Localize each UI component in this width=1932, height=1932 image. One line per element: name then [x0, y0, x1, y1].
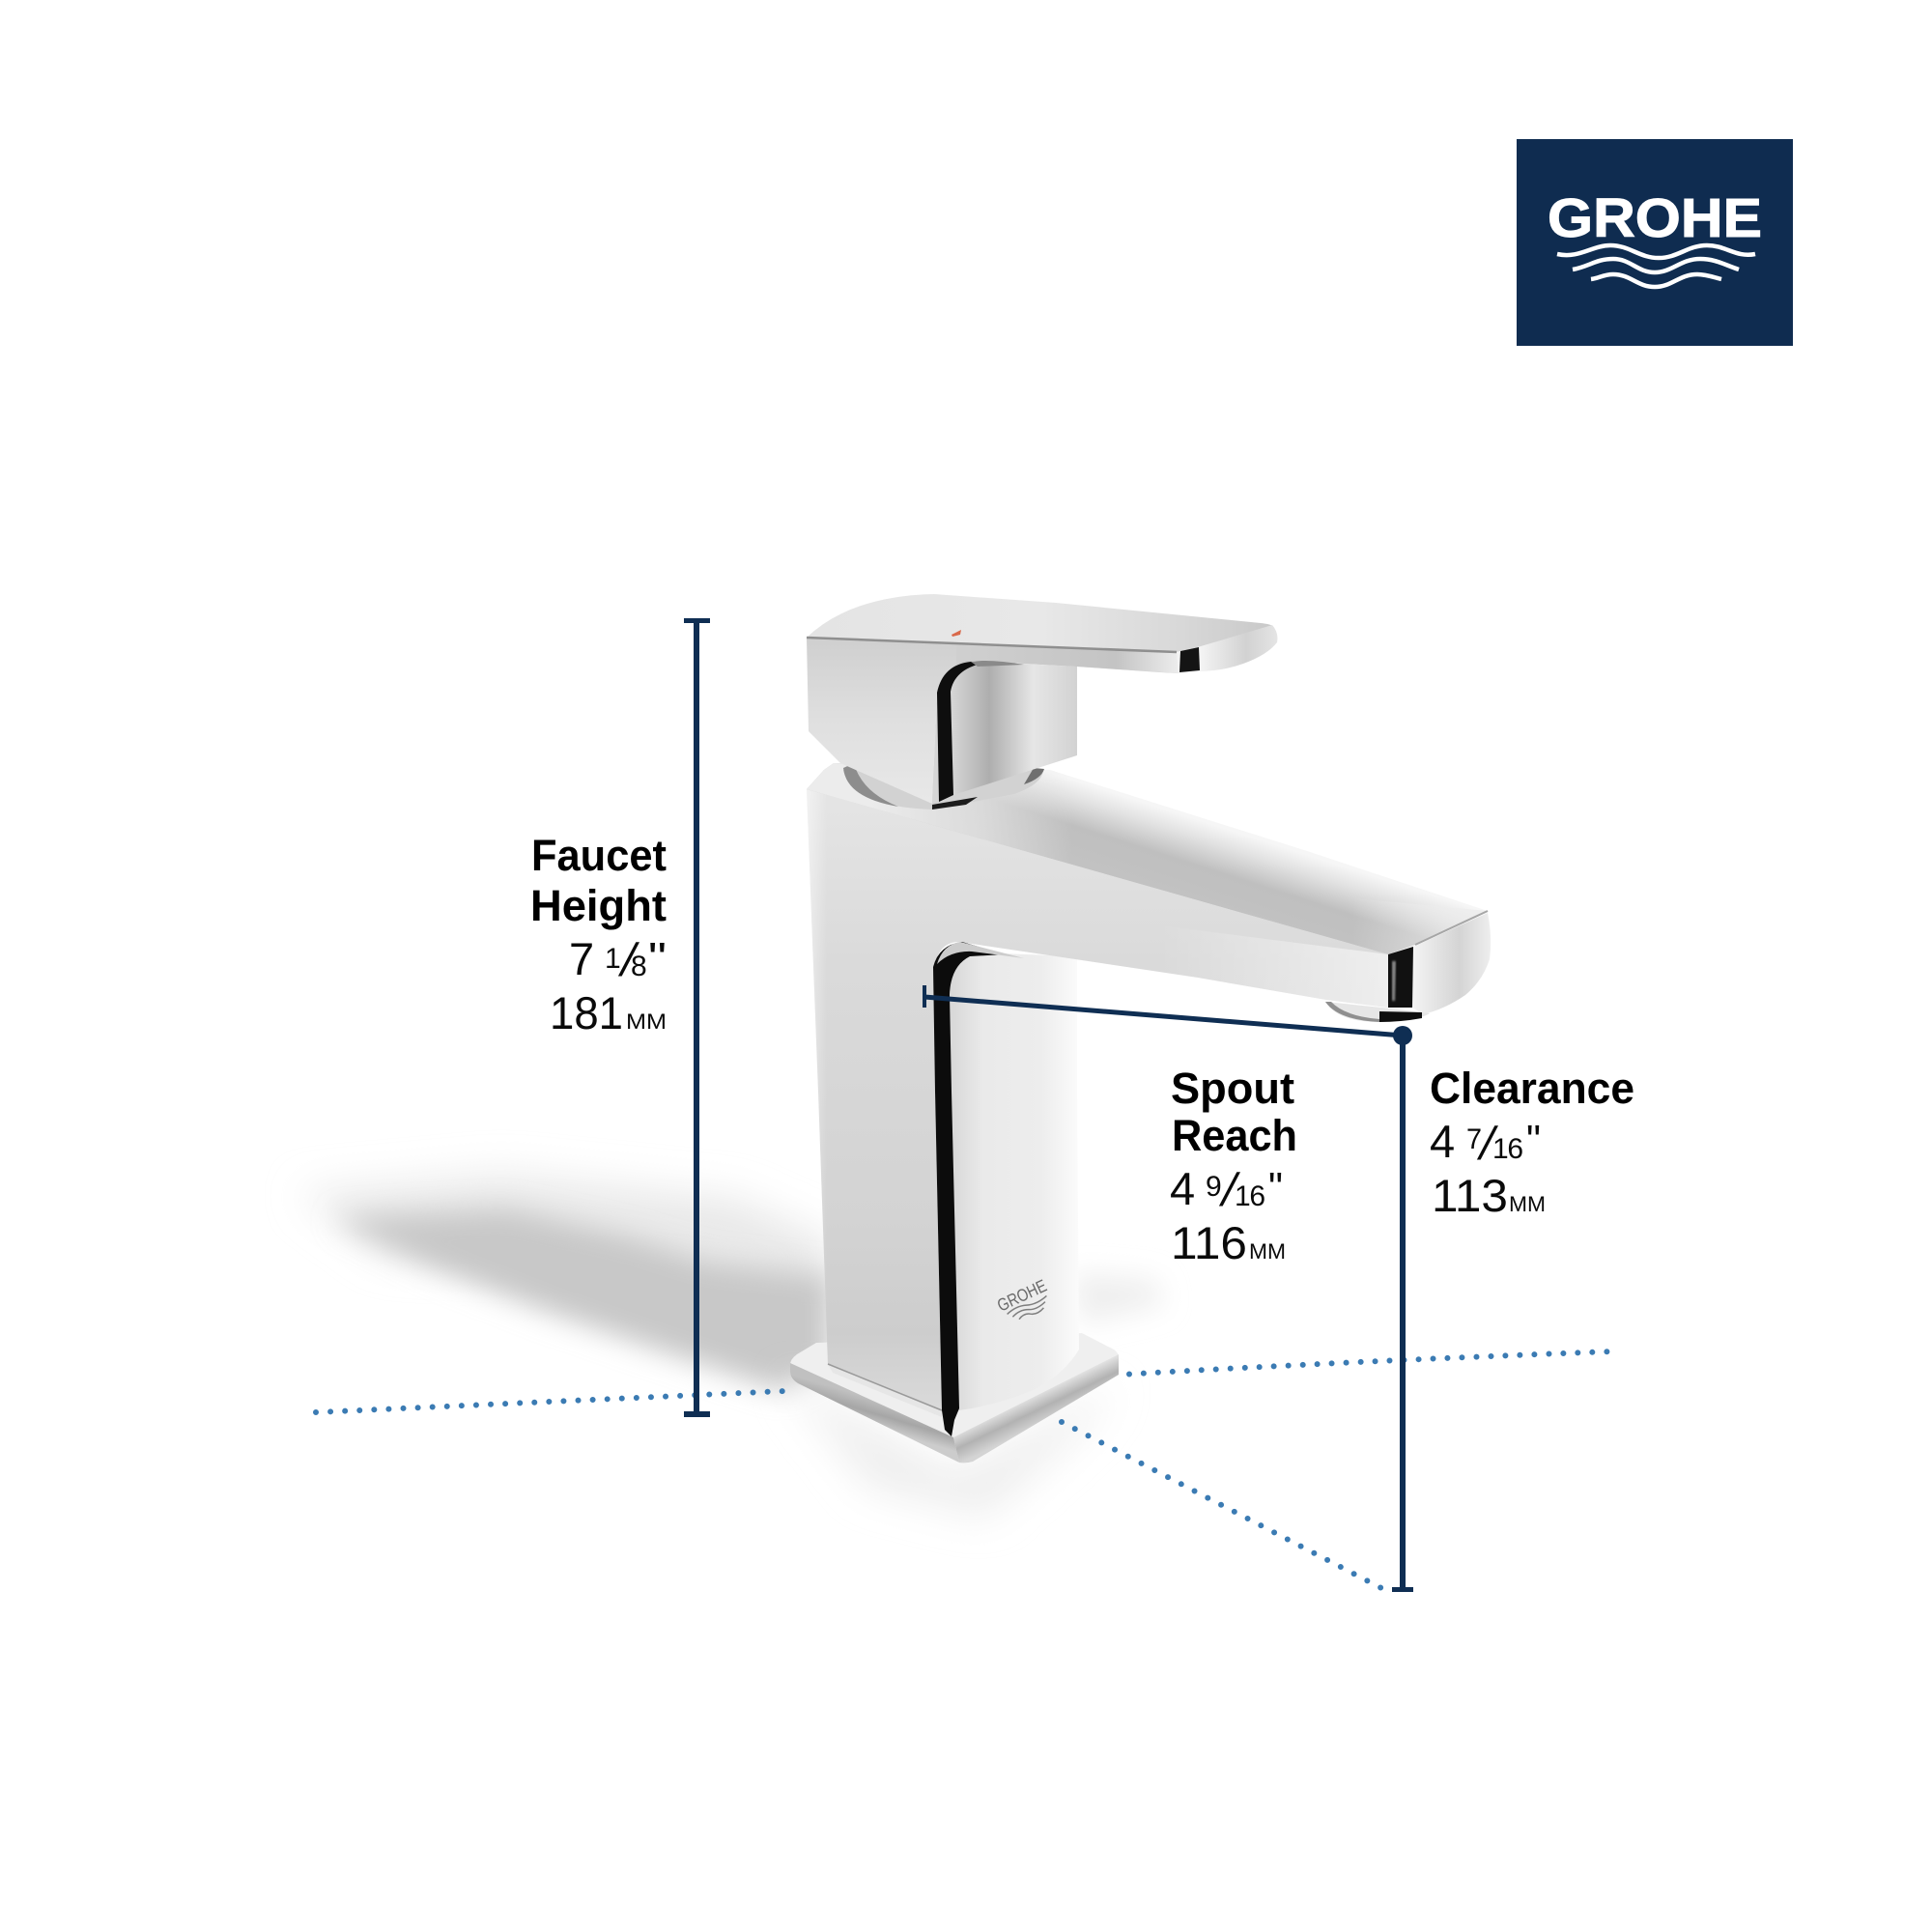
handle lip	[956, 645, 1179, 673]
label: faucet height: 8	[631, 951, 647, 982]
handle tip	[1177, 625, 1277, 673]
label: clearance	[1430, 1064, 1634, 1221]
handle dark edge	[937, 661, 1024, 802]
label: faucet height: "	[648, 934, 667, 981]
label: faucet height: Height	[530, 881, 667, 930]
floor guide: front dotted line	[1062, 1422, 1383, 1589]
label: clearance: /	[1474, 1119, 1500, 1170]
floor guide: left dotted line	[316, 1391, 784, 1412]
label: clearance: "	[1526, 1117, 1541, 1164]
label: spout reach: MM	[1249, 1239, 1286, 1264]
lever handle	[807, 594, 1277, 804]
label: spout reach	[1170, 1064, 1297, 1268]
stem inner dark edge	[933, 942, 1024, 1436]
handle top face	[807, 594, 1272, 652]
label: faucet height: 7	[569, 933, 594, 984]
faucet base plate	[790, 1333, 1119, 1463]
faucet mini logo: GROHE	[994, 1276, 1050, 1316]
label: clearance: 113	[1432, 1170, 1508, 1221]
label: spout reach: /	[1216, 1165, 1242, 1216]
logo wordmark: GROHE	[1548, 187, 1762, 249]
label: clearance: 16	[1492, 1133, 1523, 1165]
faucet stem right face	[942, 952, 1079, 1410]
label: spout reach: 9	[1206, 1171, 1222, 1203]
aerator nozzle	[1325, 1002, 1430, 1022]
handle front block	[807, 638, 1179, 804]
label: clearance: Clearance	[1430, 1064, 1634, 1113]
label: faucet height: 181	[550, 987, 623, 1038]
label: faucet height: Faucet	[531, 831, 667, 880]
label: spout reach: Reach	[1172, 1111, 1297, 1160]
spout end face	[1412, 913, 1491, 1014]
swivel collar	[843, 763, 1044, 810]
floor guide: right dotted line	[1129, 1351, 1613, 1374]
label: faucet height: 1	[605, 943, 621, 975]
dimension: faucet height	[684, 618, 710, 1417]
label: spout reach: 16	[1235, 1180, 1265, 1212]
GROHE logo	[1517, 139, 1793, 346]
faucet stem left face and spout side	[807, 789, 1388, 1417]
dimension: spout reach and clearance	[923, 985, 1413, 1592]
faucet illustration	[790, 594, 1491, 1463]
label: clearance: 4	[1430, 1116, 1455, 1167]
label: spout reach: "	[1268, 1164, 1283, 1211]
label: faucet height: /	[615, 935, 641, 986]
label: clearance: MM	[1509, 1192, 1546, 1216]
label: spout reach: 4	[1170, 1163, 1195, 1214]
label: spout reach: 116	[1171, 1217, 1247, 1268]
hot indicator	[952, 630, 961, 637]
handle side block	[932, 661, 1077, 804]
label: faucet height: MM	[626, 1009, 667, 1034]
label: faucet height	[530, 831, 667, 1038]
label: clearance: 7	[1466, 1123, 1482, 1155]
label: spout reach: Spout	[1171, 1064, 1294, 1113]
faucet mini logo	[994, 1276, 1055, 1326]
logo waves	[1557, 245, 1755, 287]
faucet cast shadow	[299, 1175, 1164, 1517]
spout dark edge	[1388, 947, 1413, 1008]
spout top face	[807, 763, 1488, 954]
